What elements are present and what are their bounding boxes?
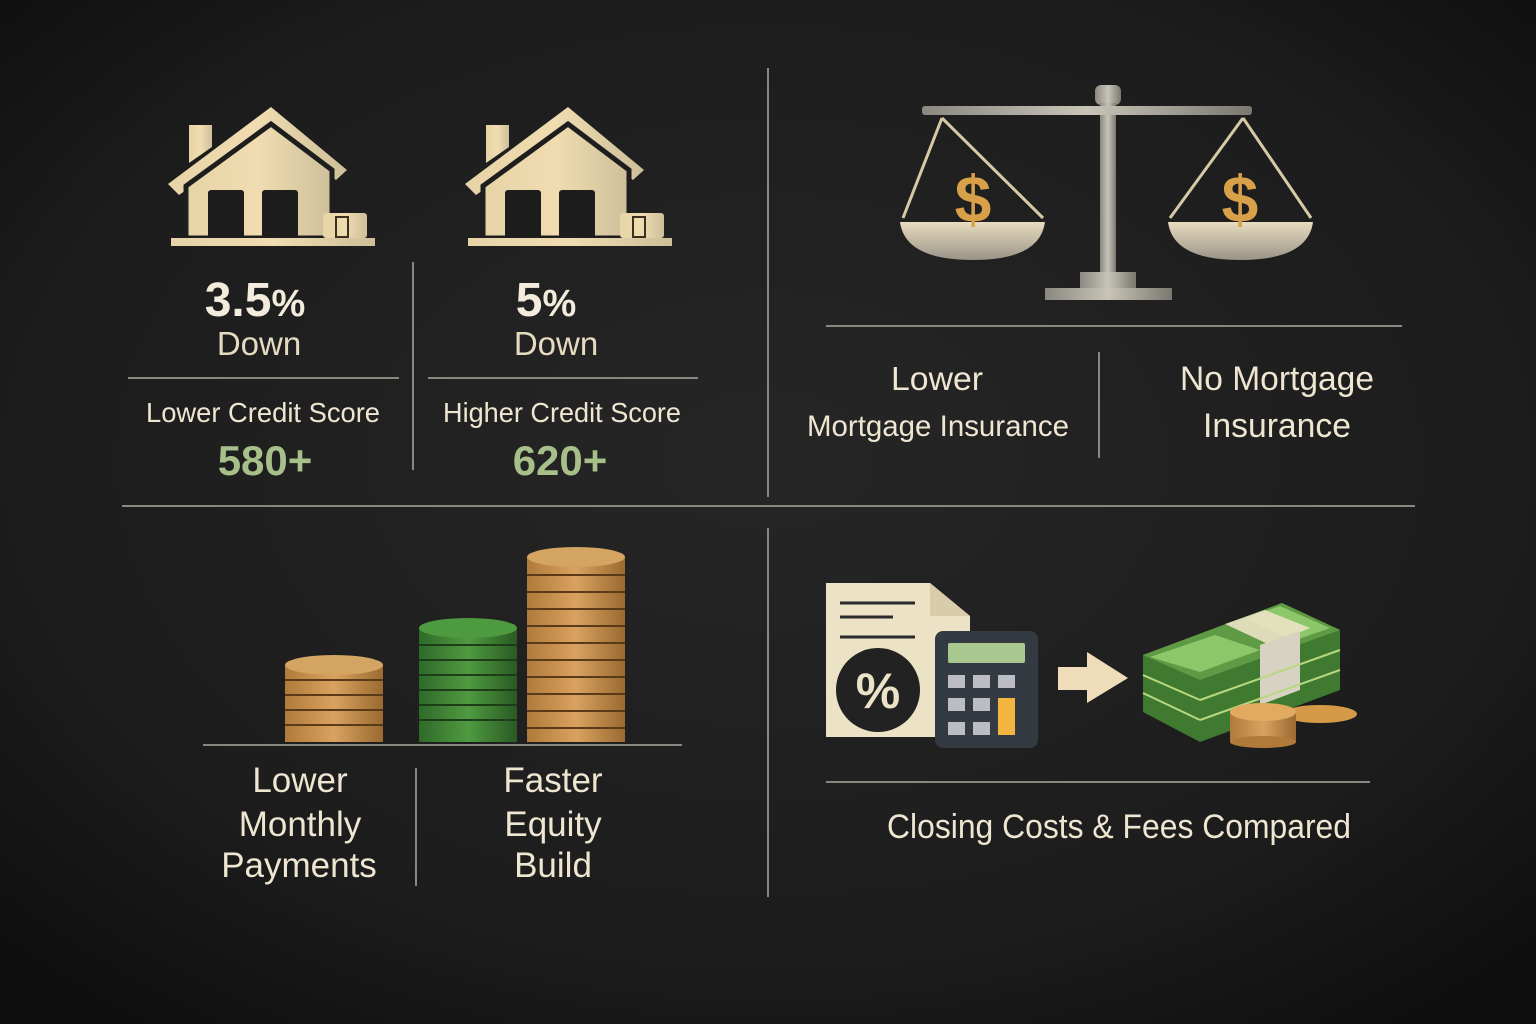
arrow [1058, 652, 1128, 703]
text: 3.5% down [205, 274, 305, 362]
text: higher credit score 620+: 620+ [513, 437, 607, 484]
panel: closing costs [826, 583, 1370, 846]
text: closing costs & fees compared: Closing Costs & Fees Compared [887, 808, 1351, 846]
icon: document with percent: % [856, 663, 900, 719]
icon: balance scale [900, 85, 1313, 300]
text: 3.5% down: Down [217, 325, 301, 362]
text: lower mortgage insurance: Mortgage Insurance [807, 410, 1069, 443]
text: 5% down: Down [514, 325, 598, 362]
text: lower monthly payments: Monthly [239, 805, 362, 844]
text: higher credit score 620+: Higher Credit Score [443, 397, 681, 428]
text: no mortgage insurance: No Mortgage [1180, 360, 1374, 398]
panel: mortgage insurance [807, 85, 1402, 458]
text: lower mortgage insurance [807, 360, 1069, 443]
icon: document with percent [826, 583, 970, 737]
text: lower credit score 580+ [146, 397, 380, 484]
text: faster equity build: Faster [503, 761, 603, 800]
text: lower credit score 580+: Lower Credit Score [146, 397, 380, 428]
panel: monthly payments vs equity [203, 547, 682, 886]
text: no mortgage insurance: Insurance [1203, 407, 1351, 445]
text: lower monthly payments: Lower [252, 761, 348, 800]
icon: balance scale: $ [955, 162, 991, 236]
text: 5% down [514, 274, 598, 362]
icon: balance scale: $ [1222, 162, 1258, 236]
icon: cash and coins [1143, 603, 1357, 748]
text: faster equity build [503, 761, 603, 885]
text: lower mortgage insurance: Lower [891, 360, 983, 397]
text: lower monthly payments [221, 761, 377, 885]
icon: house 3.5% [168, 107, 375, 246]
text: lower monthly payments: Payments [221, 846, 377, 885]
text: faster equity build: Equity [504, 805, 602, 844]
text: lower credit score 580+: 580+ [218, 437, 312, 484]
text: no mortgage insurance [1180, 360, 1374, 445]
icon: calculator [935, 631, 1038, 748]
text: 3.5% down: 3.5% [205, 274, 305, 327]
text: higher credit score 620+ [443, 397, 681, 484]
panel: down payment [128, 107, 698, 484]
chart: coin stacks [285, 547, 625, 742]
text: 5% down: 5% [516, 274, 576, 327]
icon: house 5% [465, 107, 672, 246]
text: faster equity build: Build [514, 846, 592, 885]
